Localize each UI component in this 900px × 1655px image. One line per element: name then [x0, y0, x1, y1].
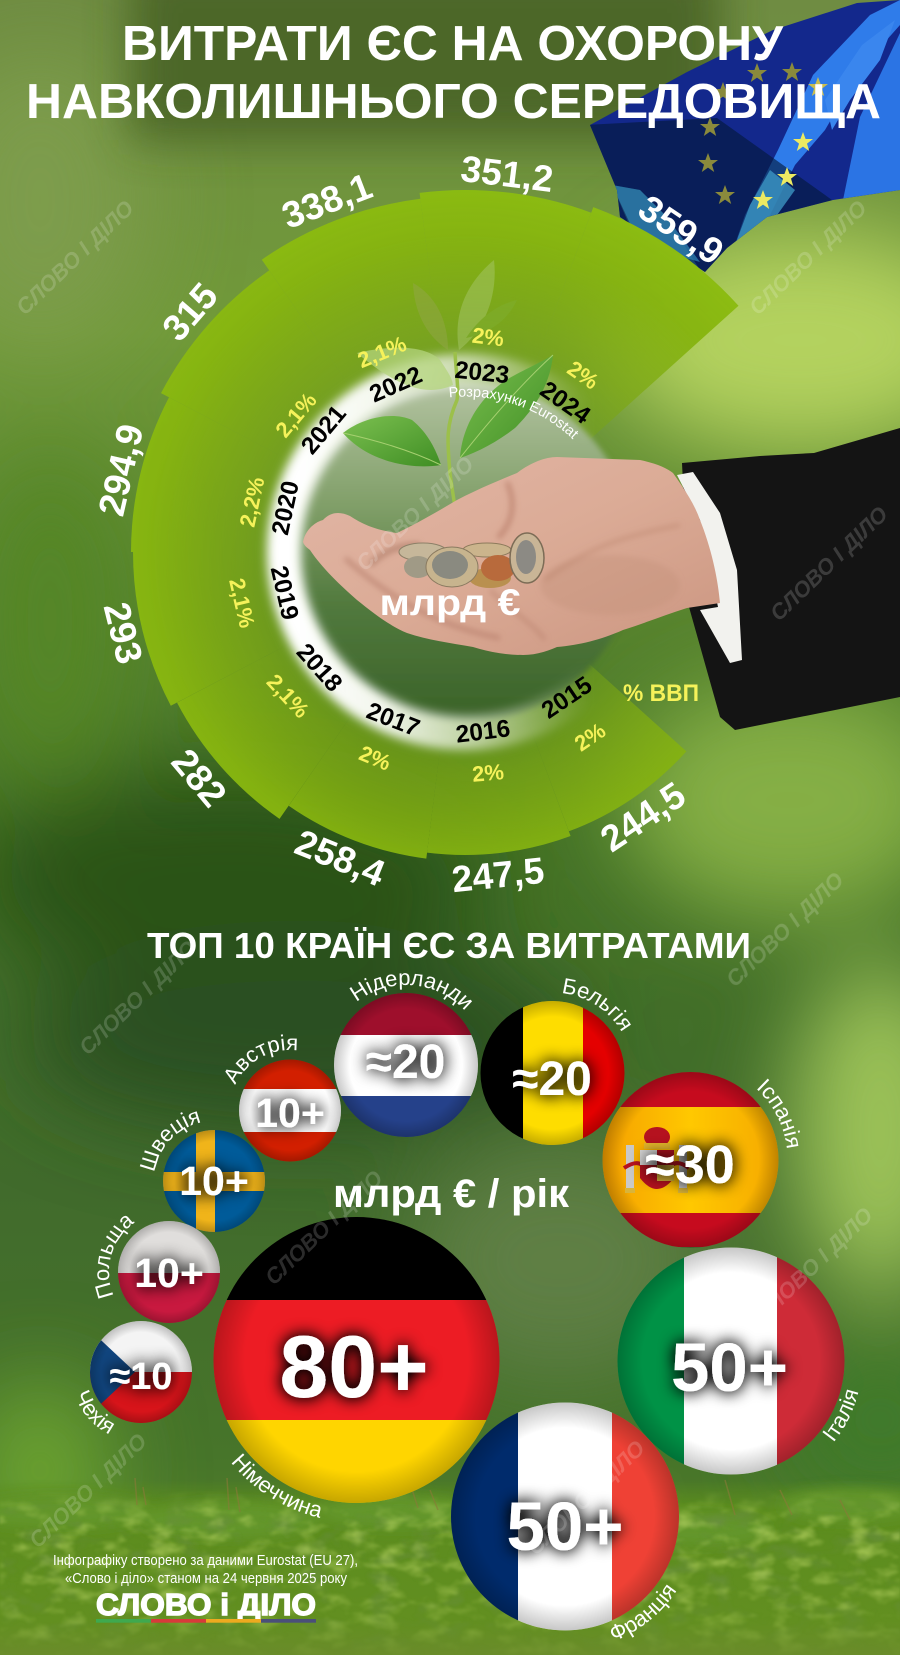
sector values in billion euro: 293 — [96, 598, 150, 668]
sector 2017 — [289, 688, 444, 859]
sector values in billion euro: 258,4 — [289, 822, 391, 895]
moss base — [0, 1480, 900, 1655]
flag: Italy — [617, 1247, 845, 1475]
year labels: 2022 — [366, 362, 426, 408]
flag: Netherlands — [334, 993, 478, 1137]
title: НАВКОЛИШНЬОГО СЕРЕДОВИЩА — [26, 75, 881, 129]
country spending figures: ≈20 — [366, 1036, 445, 1089]
sector values in billion euro: 351,2 — [459, 148, 555, 200]
source note: Інфографіку створено за даними Eurostat (EU 27), — [53, 1552, 358, 1569]
inner disc — [295, 382, 635, 722]
sector 2024 — [522, 207, 738, 442]
sector values in billion euro: 315 — [154, 275, 226, 349]
percent of GDP labels: 2% — [570, 718, 610, 756]
percent of GDP legend: % ВВП — [623, 680, 699, 707]
sector 2016 — [427, 707, 571, 855]
upper translucent leaves — [413, 260, 517, 350]
sector 2015 — [522, 662, 686, 831]
watermarks: СЛОВО І ДІЛО — [744, 195, 872, 320]
year labels: 2021 — [296, 400, 352, 460]
country names: Бельгія — [563, 978, 631, 1032]
top 10 heading: ТОП 10 КРАЇН ЄС ЗА ВИТРАТАМИ — [147, 925, 751, 966]
palm shading — [345, 482, 680, 640]
flag: Austria — [238, 1059, 342, 1163]
year labels: 2015 — [537, 672, 597, 724]
sector values in billion euro: 359,9 — [631, 187, 731, 273]
coins — [399, 533, 544, 588]
year labels: 2016 — [454, 715, 512, 749]
country names: Нідерланди — [350, 973, 472, 1010]
source note — [53, 1552, 358, 1587]
title: ВИТРАТИ ЄС НА ОХОРОНУ — [122, 17, 784, 71]
country spending figures — [109, 1036, 788, 1565]
coat of arms — [624, 1127, 689, 1193]
sector 2023 — [420, 190, 591, 397]
flag: Czechia — [88, 1321, 192, 1423]
country spending figures: ≈10 — [109, 1356, 173, 1398]
right bright fold — [843, 33, 900, 200]
sector 2022 — [262, 199, 444, 416]
country names: Польща — [95, 1216, 135, 1299]
dark translucent square — [585, 118, 832, 280]
hand holding coins — [303, 457, 720, 655]
lower-left teal fold — [612, 185, 700, 270]
plant sprout — [343, 260, 553, 545]
country names — [78, 973, 858, 1639]
country names: Чехія — [78, 1390, 114, 1434]
left leaf — [343, 416, 441, 466]
country spending figures: ≈30 — [645, 1135, 735, 1195]
sector values in billion euro: 244,5 — [593, 774, 693, 860]
percent of GDP labels: 2% — [471, 323, 505, 351]
watermarks: СЛОВО І ДІЛО — [522, 1435, 650, 1560]
sector values in billion euro: 338,1 — [276, 165, 378, 237]
percent of GDP labels: 2,1% — [224, 576, 260, 630]
stem — [448, 352, 460, 545]
title — [26, 17, 881, 129]
logo: Slovo i Dilo: СЛОВО і ДІЛО — [96, 1587, 316, 1622]
EU flag — [585, 0, 900, 280]
right leaf — [460, 355, 553, 458]
light leaf behind 2022 — [357, 348, 453, 390]
watermarks: СЛОВО І ДІЛО — [750, 1202, 878, 1327]
percent of GDP labels: 2,2% — [235, 475, 269, 529]
flag: France — [451, 1402, 680, 1631]
suit sleeve and shirt cuff — [677, 428, 900, 730]
watermarks: СЛОВО І ДІЛО — [351, 451, 479, 576]
country names: Франція — [610, 1584, 676, 1639]
country names: Італія — [822, 1390, 858, 1442]
source note: «Слово і діло» станом на 24 червня 2025 року — [65, 1570, 347, 1587]
country spending figures: 10+ — [179, 1158, 249, 1204]
sector 2019 — [133, 552, 319, 706]
country spending figures: 50+ — [671, 1329, 788, 1406]
watermarks: СЛОВО І ДІЛО — [765, 501, 893, 626]
watermarks: СЛОВО І ДІЛО — [74, 935, 202, 1060]
country names: Німеччина — [232, 1453, 320, 1518]
flag: Germany — [213, 1217, 500, 1504]
country names: Австрія — [225, 1034, 297, 1085]
sector 2018 — [177, 628, 371, 819]
year labels: 2024 — [535, 376, 595, 430]
sector 2020 — [131, 397, 319, 552]
flag: Spain — [602, 1072, 779, 1248]
percent of GDP labels: 2,1% — [270, 388, 322, 442]
percent of GDP labels: 2,1% — [354, 331, 410, 373]
country names: Швеція — [140, 1111, 200, 1171]
chart: ten sectors of annual spending — [131, 190, 738, 859]
grass strands — [135, 1478, 850, 1520]
sector 2021 — [161, 270, 371, 476]
year labels: 2019 — [265, 563, 303, 623]
sector values in billion euro: 294,9 — [91, 420, 151, 520]
white ring behind the years — [284, 371, 600, 733]
percent of GDP labels: 2% — [356, 740, 394, 776]
bright fold — [733, 0, 900, 250]
percent of GDP labels: 2,1% — [262, 669, 314, 723]
percent of GDP labels: 2% — [563, 356, 603, 394]
percent of GDP labels: 2% — [471, 759, 505, 787]
country spending figures: 80+ — [279, 1317, 429, 1416]
year labels: 2017 — [363, 698, 423, 742]
flag: Sweden — [163, 1130, 266, 1232]
flag: Poland — [118, 1221, 220, 1324]
sector values in billion euro — [91, 148, 731, 900]
unit label in the hand: млрд € — [380, 582, 520, 623]
percent of GDP labels — [224, 323, 610, 787]
country names: Іспанія — [757, 1078, 800, 1148]
watermarks: СЛОВО І ДІЛО — [721, 867, 849, 992]
sector values in billion euro: 282 — [163, 741, 235, 815]
country spending figures: ≈20 — [512, 1053, 592, 1106]
year labels: 2018 — [291, 639, 347, 697]
unit label for countries: млрд € / рік — [333, 1172, 570, 1216]
year labels: 2020 — [267, 479, 305, 537]
year labels: 2023 — [453, 357, 511, 389]
watermarks: СЛОВО І ДІЛО — [24, 1428, 152, 1553]
sector values in billion euro: 247,5 — [450, 850, 546, 900]
Eurostat calculation note: Розрахунки Eurostat — [450, 387, 578, 440]
flag: Belgium — [480, 1001, 625, 1145]
watermarks: СЛОВО І ДІЛО — [11, 195, 139, 320]
country spending figures: 10+ — [255, 1090, 325, 1136]
year labels — [265, 357, 597, 749]
watermarks: СЛОВО І ДІЛО — [260, 1165, 388, 1290]
country spending figures: 10+ — [134, 1250, 204, 1296]
country spending figures: 50+ — [506, 1488, 624, 1565]
